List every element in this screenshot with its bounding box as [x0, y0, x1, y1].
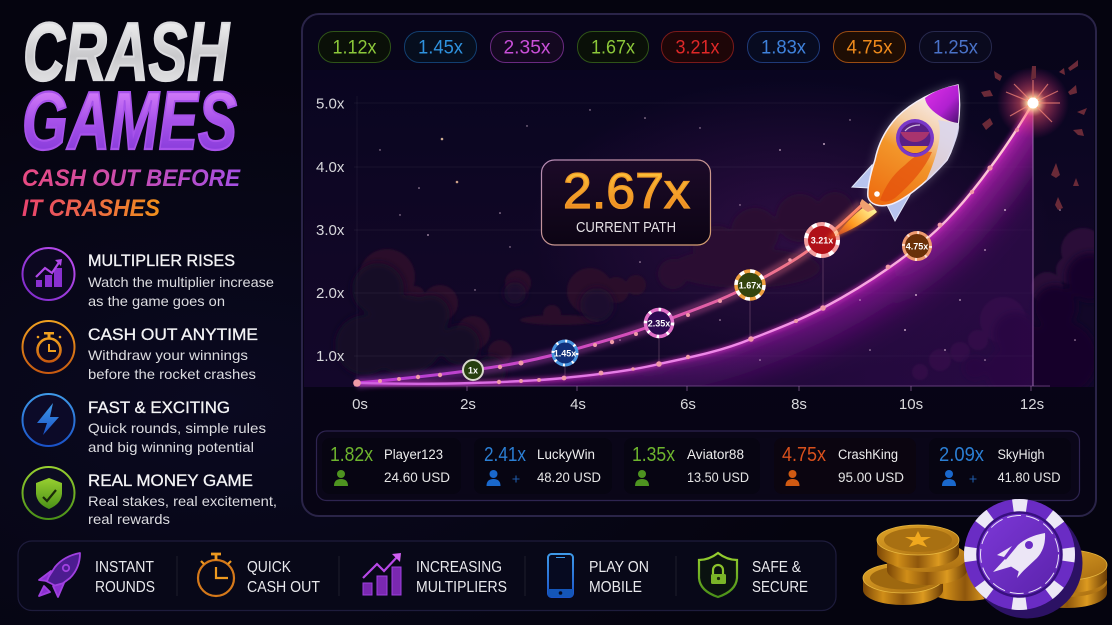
feature list [22, 248, 277, 527]
bottom feature bar [18, 541, 836, 610]
pill 1.12x [318, 32, 390, 62]
current multiplier callout: 2.67x [563, 163, 690, 219]
chip 3.21x: 3.21x [811, 236, 833, 246]
axis labels [316, 96, 1044, 413]
pill 4.75x [834, 32, 906, 62]
pill 3.21x: 3.21x [676, 36, 720, 58]
subtitle line two: IT CRASHES [22, 195, 161, 222]
cloud left [358, 248, 512, 363]
item: safe and secure: SECURE [752, 579, 808, 596]
axis labels: 0s [352, 396, 368, 413]
feature: real money game [22, 467, 277, 527]
axis labels: 12s [1020, 396, 1044, 413]
chip 1.67x: 1.67x [739, 280, 761, 290]
player card: LuckyWin [474, 438, 612, 494]
current path curve [357, 205, 862, 383]
icon: phone [548, 554, 573, 597]
current multiplier callout [542, 160, 710, 245]
axis ticks [467, 386, 1031, 391]
poker chip [964, 499, 1082, 618]
coin stack right [1027, 550, 1107, 608]
player card: LuckyWin: 48.20 USD [537, 469, 601, 485]
feature: cash out anytime: CASH OUT ANYTIME [88, 326, 258, 344]
icon: timer [198, 554, 234, 596]
axis labels: 2.0x [316, 285, 345, 302]
feature: cash out anytime: Withdraw your winnings [88, 347, 248, 363]
lower multiplier curve [357, 103, 1033, 384]
icon: player plus [942, 470, 976, 486]
item: instant rounds: ROUNDS [95, 579, 155, 596]
icon: chart [363, 553, 401, 595]
feature: cash out anytime [22, 321, 258, 382]
player card: CrashKing [774, 438, 916, 494]
axis labels: 10s [899, 396, 923, 413]
chip 2.35x [646, 310, 672, 336]
player card: Player123: 1.82x [330, 444, 373, 466]
feature: real money game: REAL MONEY GAME [88, 472, 253, 490]
crash burst [981, 60, 1087, 210]
grid lines [354, 96, 1033, 386]
feature: multiplier rises [22, 248, 274, 309]
player card: Aviator88 [624, 438, 760, 494]
axis labels: 6s [680, 396, 696, 413]
axis labels: 4.0x [316, 159, 345, 176]
player card: CrashKing: 4.75x [782, 444, 826, 466]
rocket nozzle [860, 199, 875, 212]
player card: SkyHigh: SkyHigh [998, 447, 1044, 462]
item: safe and secure [699, 553, 808, 597]
item: increasing multipliers: MULTIPLIERS [416, 579, 507, 596]
coin middle [887, 542, 967, 585]
icon: rising bars [22, 248, 74, 300]
axis labels: 1.0x [316, 348, 345, 365]
icon: player [635, 470, 649, 486]
player card: CrashKing: 95.00 USD [838, 469, 904, 485]
item: instant rounds: INSTANT [95, 559, 154, 576]
marker chips [463, 224, 930, 380]
pill 1.83x [748, 32, 820, 62]
feature: multiplier rises: Watch the multiplier increase [88, 274, 274, 290]
cloud middle [504, 268, 646, 325]
chip 3.21x [806, 224, 838, 256]
item: quick cash out: CASH OUT [247, 579, 320, 596]
chip 1.45x: 1.45x [554, 348, 576, 358]
pill 2.35x [490, 32, 564, 62]
feature: multiplier rises: MULTIPLIER RISES [88, 252, 235, 270]
item: play on mobile [548, 554, 649, 597]
pill 2.35x: 2.35x [504, 36, 551, 58]
chip rocket icon [993, 533, 1045, 578]
feature: fast and exciting [22, 394, 266, 455]
player card: CrashKing: CrashKing [838, 447, 898, 462]
icon: player plus [486, 470, 520, 486]
item: play on mobile: MOBILE [589, 579, 642, 596]
icon: lightning bolt [22, 394, 74, 446]
chip 4.75x: 4.75x [906, 242, 928, 252]
cloud upper right [658, 192, 853, 289]
feature: fast and exciting: FAST & EXCITING [88, 399, 230, 417]
chip 1.67x [736, 271, 764, 299]
chip 2.35x: 2.35x [648, 318, 670, 328]
icon: player [786, 470, 800, 486]
pill 1.67x: 1.67x [591, 36, 635, 58]
marker drop lines [473, 258, 823, 384]
player card: Player123 [322, 438, 461, 494]
player card: SkyHigh: 41.80 USD [998, 469, 1060, 485]
pill 3.21x [662, 32, 734, 62]
cloud far right [912, 228, 1094, 380]
rocket body [868, 85, 960, 206]
current multiplier callout: CURRENT PATH [576, 220, 676, 236]
item: increasing multipliers [363, 553, 507, 596]
axis labels: 3.0x [316, 222, 345, 239]
chip 4.75x [904, 232, 930, 260]
rocket window [896, 119, 934, 157]
feature: cash out anytime: before the rocket crashes [88, 366, 256, 382]
player card: Aviator88: 1.35x [632, 444, 675, 466]
multiplier history pills [318, 32, 992, 62]
player card: Player123: Player123 [384, 447, 443, 462]
coin back [925, 566, 1005, 601]
player card: Aviator88: Aviator88 [687, 447, 744, 462]
chip 1.45x [553, 341, 577, 365]
item: instant rounds [39, 553, 155, 597]
vertical crash line [1032, 103, 1034, 386]
clouds [358, 195, 1094, 380]
item: play on mobile: PLAY ON [589, 559, 649, 576]
coin left [863, 563, 943, 605]
title: games: GAMES [22, 74, 237, 167]
chip 1x [463, 360, 483, 380]
feature: real money game: real rewards [88, 511, 170, 527]
axis labels: 4s [570, 396, 586, 413]
player card: LuckyWin: 2.41x [484, 444, 526, 466]
feature: real money game: Real stakes, real excitement, [88, 493, 277, 509]
rocket nose [925, 85, 959, 123]
coins and chip [863, 499, 1107, 618]
rocket fins [852, 165, 911, 221]
player card: SkyHigh [929, 438, 1071, 494]
pill 1.83x: 1.83x [761, 36, 806, 58]
player card: Aviator88: 13.50 USD [687, 469, 749, 485]
chip 1x: 1x [468, 366, 478, 376]
curve dots [353, 128, 1019, 387]
player card: Player123: 24.60 USD [384, 469, 450, 485]
line chart [304, 60, 1112, 413]
icon: rocket [39, 553, 80, 597]
axis labels: 8s [791, 396, 807, 413]
pill 1.45x: 1.45x [418, 36, 463, 58]
coin top with star [877, 525, 959, 568]
pill 1.25x [920, 32, 992, 62]
plot backdrop [304, 70, 1094, 390]
title block [22, 5, 241, 222]
rocket flame [826, 203, 878, 240]
stars [379, 109, 1076, 361]
pill 1.25x: 1.25x [933, 36, 978, 58]
pill 1.67x [578, 32, 648, 62]
icon: stopwatch [22, 321, 74, 373]
icon: player [334, 470, 348, 486]
debris shards [981, 60, 1087, 210]
pill 1.45x [404, 32, 476, 62]
player card: LuckyWin: LuckyWin [537, 447, 595, 462]
rocket [826, 85, 960, 240]
item: increasing multipliers: INCREASING [416, 559, 502, 576]
item: quick cash out: QUICK [247, 559, 292, 576]
axis labels: 5.0x [316, 96, 345, 112]
pill 4.75x: 4.75x [846, 36, 893, 58]
icon: shield lock [699, 553, 737, 597]
title: crash: CRASH [23, 5, 230, 98]
icon: shield check [22, 467, 74, 519]
area under lower curve [357, 100, 1034, 388]
feature: fast and exciting: Quick rounds, simple rules [88, 420, 266, 436]
feature: multiplier rises: as the game goes on [88, 293, 225, 309]
item: safe and secure: SAFE & [752, 559, 802, 576]
subtitle line one: CASH OUT BEFORE [22, 165, 241, 192]
item: quick cash out [198, 554, 320, 596]
player card: SkyHigh: 2.09x [939, 444, 984, 466]
player stats strip [316, 431, 1080, 500]
feature: fast and exciting: and big winning potential [88, 439, 254, 455]
panel: crash chart [302, 14, 1112, 516]
baseline axis [354, 385, 1050, 387]
axis labels: 2s [460, 396, 476, 413]
pill 1.12x: 1.12x [332, 36, 377, 58]
